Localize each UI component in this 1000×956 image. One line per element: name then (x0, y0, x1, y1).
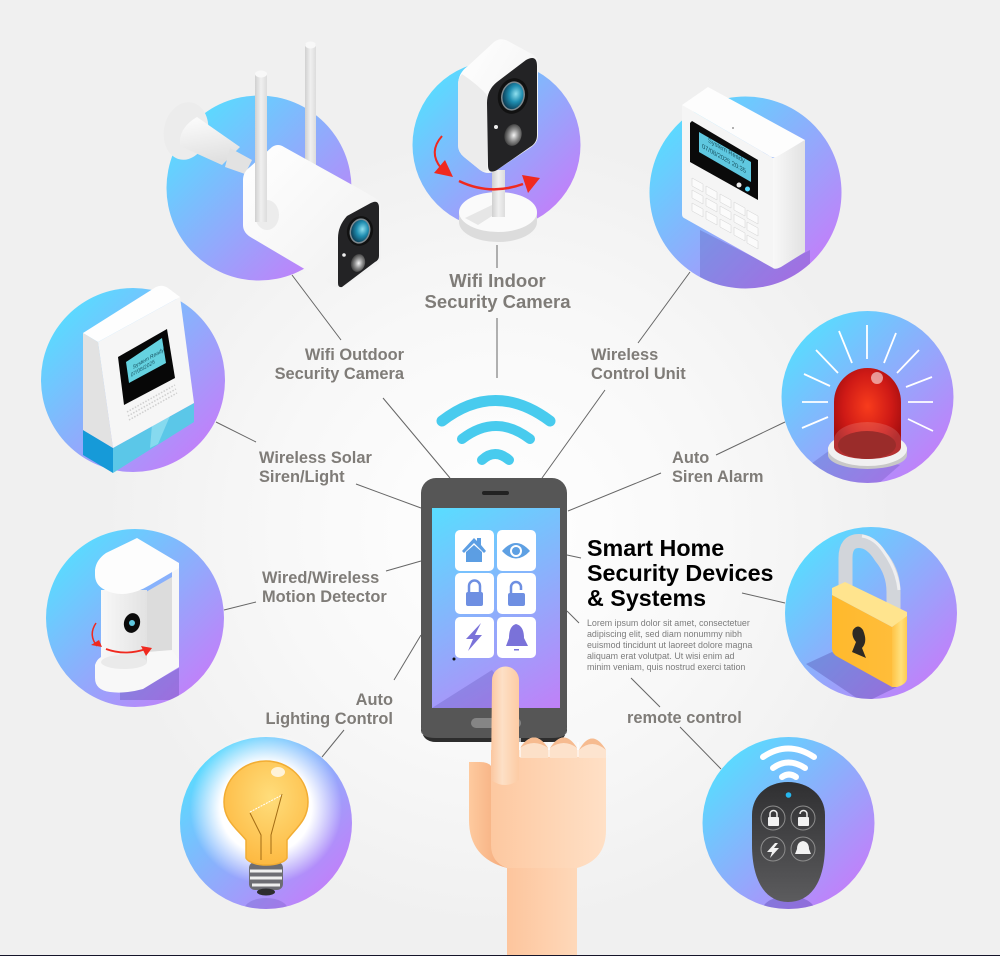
shackle (846, 541, 894, 618)
rotation arrows (91, 623, 152, 656)
glow (190, 732, 342, 884)
display: 07/08/2025 20:35 (702, 143, 746, 175)
circle (782, 311, 954, 483)
shackle highlight (862, 536, 899, 590)
connector lines (216, 245, 785, 769)
base shadow (245, 898, 287, 909)
panel: wireless solar siren (41, 286, 225, 473)
circle (412, 61, 580, 229)
lock front (832, 595, 892, 687)
shadow (120, 668, 179, 700)
label: wireless control unit: Control Unit (591, 365, 686, 383)
tile: lightning (455, 617, 494, 658)
screen (432, 508, 560, 708)
label: wireless solar siren light: Wireless Solar (259, 449, 372, 467)
top cap (95, 538, 179, 594)
description text: euismod tincidunt ut laoreet dolore magna (587, 640, 752, 650)
keypad (692, 178, 758, 249)
recess (146, 577, 172, 665)
nail: little (579, 738, 606, 750)
rear antenna (305, 44, 316, 169)
panel: motion detector (46, 529, 224, 707)
wrist (507, 860, 577, 956)
label: wifi outdoor security camera: Wifi Outdoor (305, 346, 405, 364)
label: wifi indoor security camera: Wifi Indoor (449, 270, 546, 291)
knuckle: little (579, 738, 606, 758)
screen (118, 329, 175, 405)
knuckle: middle (520, 738, 548, 758)
glass strip (150, 416, 170, 448)
led (786, 792, 791, 798)
description text: adipiscing elit, sed diam nonummy nibh (587, 629, 742, 639)
top (83, 286, 180, 342)
front antenna (255, 42, 316, 230)
left side (83, 333, 113, 448)
label: wifi indoor security camera: Security Camera (424, 291, 571, 312)
palm (491, 750, 606, 868)
nail: middle (520, 738, 548, 748)
keyhole (852, 626, 866, 658)
circle (180, 737, 352, 909)
panel: light bulb (180, 732, 352, 922)
home button (471, 718, 521, 728)
label: motion detector: Wired/Wireless (262, 569, 379, 587)
unit top (682, 87, 805, 157)
wifi symbol above phone (442, 400, 550, 460)
lock side (892, 615, 907, 687)
shadow (806, 652, 897, 703)
siren base (828, 432, 907, 469)
camera face (338, 202, 379, 287)
bottom edge (0, 955, 1000, 956)
remote body (752, 782, 825, 902)
tile: home (455, 530, 494, 571)
highlight (271, 767, 285, 777)
knuckle: ring (550, 738, 577, 758)
light rays (802, 325, 933, 431)
circle (702, 737, 874, 909)
panel: padlock (785, 527, 957, 703)
column foot (101, 655, 147, 669)
earpiece (482, 491, 509, 495)
title: Smart Home (587, 535, 724, 561)
phone (421, 478, 567, 742)
label: auto siren alarm: Auto (672, 449, 709, 467)
label: remote control: remote control (627, 709, 742, 727)
display (690, 121, 758, 200)
tile: unlocked (497, 573, 536, 614)
title: & Systems (587, 585, 706, 611)
finger shadow (432, 670, 520, 708)
buttons (761, 806, 815, 861)
circle (785, 527, 957, 699)
app tiles (455, 530, 536, 658)
panel: wireless control unit (650, 87, 842, 300)
description text: minim veniam, quis nostrud exerci tation (587, 662, 745, 672)
tile: locked (455, 573, 494, 614)
filament (250, 794, 282, 860)
nail: ring (550, 738, 577, 748)
label: motion detector: Motion Detector (262, 588, 387, 606)
label: auto lighting control: Lighting Control (266, 710, 393, 728)
wifi signal (763, 748, 814, 777)
description text: Lorem ipsum dolor sit amet, consectetuer (587, 618, 750, 628)
title: Security Devices (587, 560, 774, 586)
front (98, 297, 194, 448)
base (95, 650, 179, 693)
camera body (243, 145, 381, 288)
label: wifi outdoor security camera: Security Camera (275, 365, 405, 383)
panel: remote control (702, 737, 874, 924)
circle (41, 288, 225, 472)
screen: 07/08/2025 (131, 359, 155, 379)
camera face (487, 58, 537, 172)
glass (224, 761, 308, 865)
circle (46, 529, 224, 707)
rotation arrows (434, 136, 540, 193)
circle (166, 96, 352, 280)
blue base right (113, 403, 194, 473)
label: wireless solar siren light: Siren/Light (259, 468, 345, 486)
label: wireless control unit: Wireless (591, 346, 658, 364)
shadow (700, 230, 810, 288)
circle (650, 96, 842, 288)
description text: aliquam erat volutpat. Ut wisi enim ad (587, 651, 735, 661)
lock top (832, 582, 907, 627)
unit side (773, 140, 805, 269)
screw base (249, 862, 283, 896)
tile: eye (497, 530, 536, 571)
lens (494, 75, 532, 148)
lens (342, 213, 376, 274)
camera side shading (458, 74, 487, 172)
sensor lens (122, 611, 142, 635)
screen: System Ready (133, 347, 164, 371)
unit front (682, 105, 773, 268)
finger gaps (520, 738, 578, 757)
display: System Ready (708, 137, 745, 165)
blue base left (83, 430, 113, 473)
sensor column (101, 590, 147, 662)
tile: bell (497, 617, 536, 658)
wall mount (158, 98, 252, 174)
index finger (491, 666, 519, 785)
camera body (458, 39, 538, 173)
phone shell (421, 478, 567, 742)
shadow (764, 898, 813, 909)
hand (469, 666, 606, 956)
panel: wifi indoor security camera (412, 39, 580, 242)
speaker grille (127, 385, 177, 420)
label: auto lighting control: Auto (356, 691, 393, 709)
panel: auto siren alarm (782, 311, 954, 500)
label: auto siren alarm: Siren Alarm (672, 468, 763, 486)
speck (452, 658, 456, 660)
shadow (812, 452, 900, 483)
stand (459, 170, 537, 242)
thumb (469, 762, 507, 868)
siren dome (834, 368, 901, 459)
back strip (172, 563, 179, 671)
panel: wifi outdoor security camera (158, 42, 381, 288)
